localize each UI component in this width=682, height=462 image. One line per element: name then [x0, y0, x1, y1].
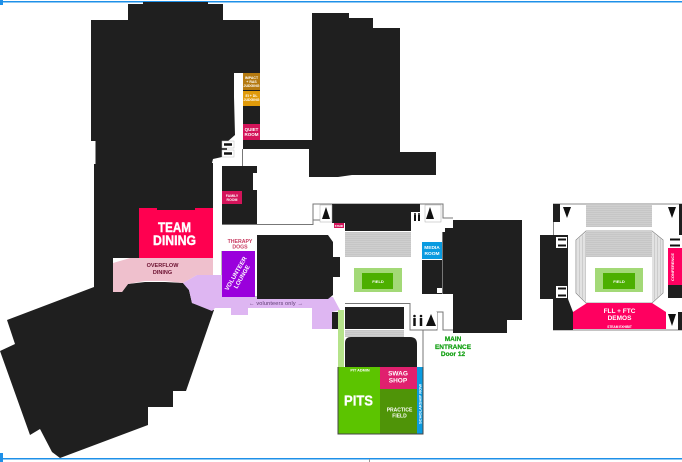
icon: arena elevators — [556, 237, 682, 298]
panel: volunteer lounge: VOLUNTEER — [225, 256, 249, 292]
panel: impact judging: IMPACT — [245, 76, 259, 80]
panel: overflow dining — [113, 258, 213, 292]
right arena building — [540, 204, 682, 330]
main arena field: FIELD — [372, 279, 384, 284]
panel: media room: ROOM — [425, 251, 439, 257]
panel: volunteer lounge — [222, 251, 255, 297]
arena outer frame — [554, 204, 682, 330]
panel: media room: MEDIA — [424, 245, 440, 251]
label: therapy dogs second line: DOGS — [232, 244, 248, 250]
panel: volunteers only corridor: ← volunteers only → — [249, 301, 303, 307]
arena bowl right seats — [652, 232, 662, 302]
main arena seating — [345, 232, 411, 257]
seating above pits — [345, 330, 404, 337]
panel: pits: PITS — [344, 392, 373, 410]
panel: family room: ROOM — [227, 198, 238, 202]
panel: team dining: DINING — [153, 232, 196, 248]
small block beside volunteers corridor — [332, 312, 338, 329]
icon: escalator lower — [425, 312, 437, 329]
icon: restroom top — [412, 212, 422, 222]
panel: swag shop — [380, 367, 417, 389]
panel: quiet room: QUIET — [245, 127, 259, 132]
icon: restroom lower — [411, 313, 425, 327]
icon: arena arrows — [563, 207, 676, 326]
arena black left side — [540, 235, 573, 330]
right hand block — [443, 220, 522, 333]
arena field: FIELD — [613, 279, 625, 284]
panel: swag shop: SWAG — [388, 370, 408, 378]
label: main entrance — [435, 336, 472, 358]
panel: team dining: TEAM — [158, 219, 191, 235]
panel: impact judging: JUDGING — [244, 84, 260, 88]
icon: small stairs — [437, 288, 442, 293]
panel: pits — [338, 367, 380, 434]
label: therapy dogs: THERAPY — [228, 239, 253, 245]
central top block — [332, 204, 420, 231]
arena bowl top seats — [586, 232, 652, 257]
panel: EI judging — [243, 91, 260, 106]
upper right building — [309, 13, 436, 177]
pit walkway strip — [338, 310, 344, 367]
pits outline — [338, 367, 423, 434]
icon: elevators main left — [222, 141, 234, 157]
panel: impact judging: + RAS — [246, 80, 257, 84]
panel: volunteer lounge: LOUNGE — [234, 264, 252, 290]
panel: EI judging: JUDGING — [244, 98, 260, 102]
block over pits — [345, 337, 417, 367]
panel: right pink room: CONFERENCE — [671, 252, 675, 281]
panel: practice field: PRACTICE — [387, 408, 413, 414]
label: main entrance: ENTRANCE — [435, 344, 472, 351]
panel: overflow dining: DINING — [153, 270, 172, 276]
arena black top left — [553, 204, 560, 222]
panel: media room — [422, 242, 442, 259]
panel: FLL FTC demos: DEMOS — [608, 315, 632, 322]
panel: right pink room — [668, 248, 682, 285]
main arena field — [354, 268, 402, 292]
arena right black side — [668, 204, 682, 330]
panel: practice field: FIELD — [392, 414, 407, 420]
panel: volunteers only corridor — [183, 275, 340, 329]
panel: scholarship row — [417, 367, 423, 434]
panel: FLL FTC demos: FLL + FTC — [604, 308, 636, 315]
panel: practice field — [380, 389, 417, 434]
panel: pits: PIT ADMIN — [350, 368, 370, 372]
panel: scholarship row: SCHOLARSHIP ROW — [418, 384, 422, 424]
panel: family room — [222, 191, 242, 204]
panel: team dining — [139, 208, 213, 258]
arena top seating — [586, 204, 652, 227]
arena field — [595, 268, 643, 292]
central block — [257, 235, 340, 299]
panel: impact judging — [243, 73, 260, 90]
label: main entrance: MAIN — [445, 336, 462, 343]
arena bowl — [576, 231, 663, 303]
corridor walls — [222, 149, 453, 367]
panel: EI judging: EI + DL — [246, 94, 258, 98]
arena bowl left seats — [577, 232, 586, 302]
label: stand: STAND — [335, 225, 343, 228]
panel: overflow dining: OVERFLOW — [147, 263, 179, 269]
panel: swag shop: SHOP — [389, 378, 408, 384]
panel: FLL FTC demos: STEAM EXHIBIT — [607, 325, 632, 329]
main left building and lower arena — [0, 2, 312, 458]
icon: escalator top right — [425, 205, 441, 222]
label: stand — [334, 223, 344, 228]
block below media room — [422, 260, 442, 294]
icon: escalator top left — [320, 205, 332, 222]
block above pits — [345, 307, 404, 329]
panel: quiet room — [243, 124, 260, 140]
family room block — [222, 166, 257, 224]
label: main entrance: Door 12 — [441, 351, 465, 358]
panel: FLL FTC demos — [573, 303, 666, 329]
panel: quiet room: ROOM — [244, 132, 259, 137]
panel: family room: FAMILY — [226, 194, 239, 198]
